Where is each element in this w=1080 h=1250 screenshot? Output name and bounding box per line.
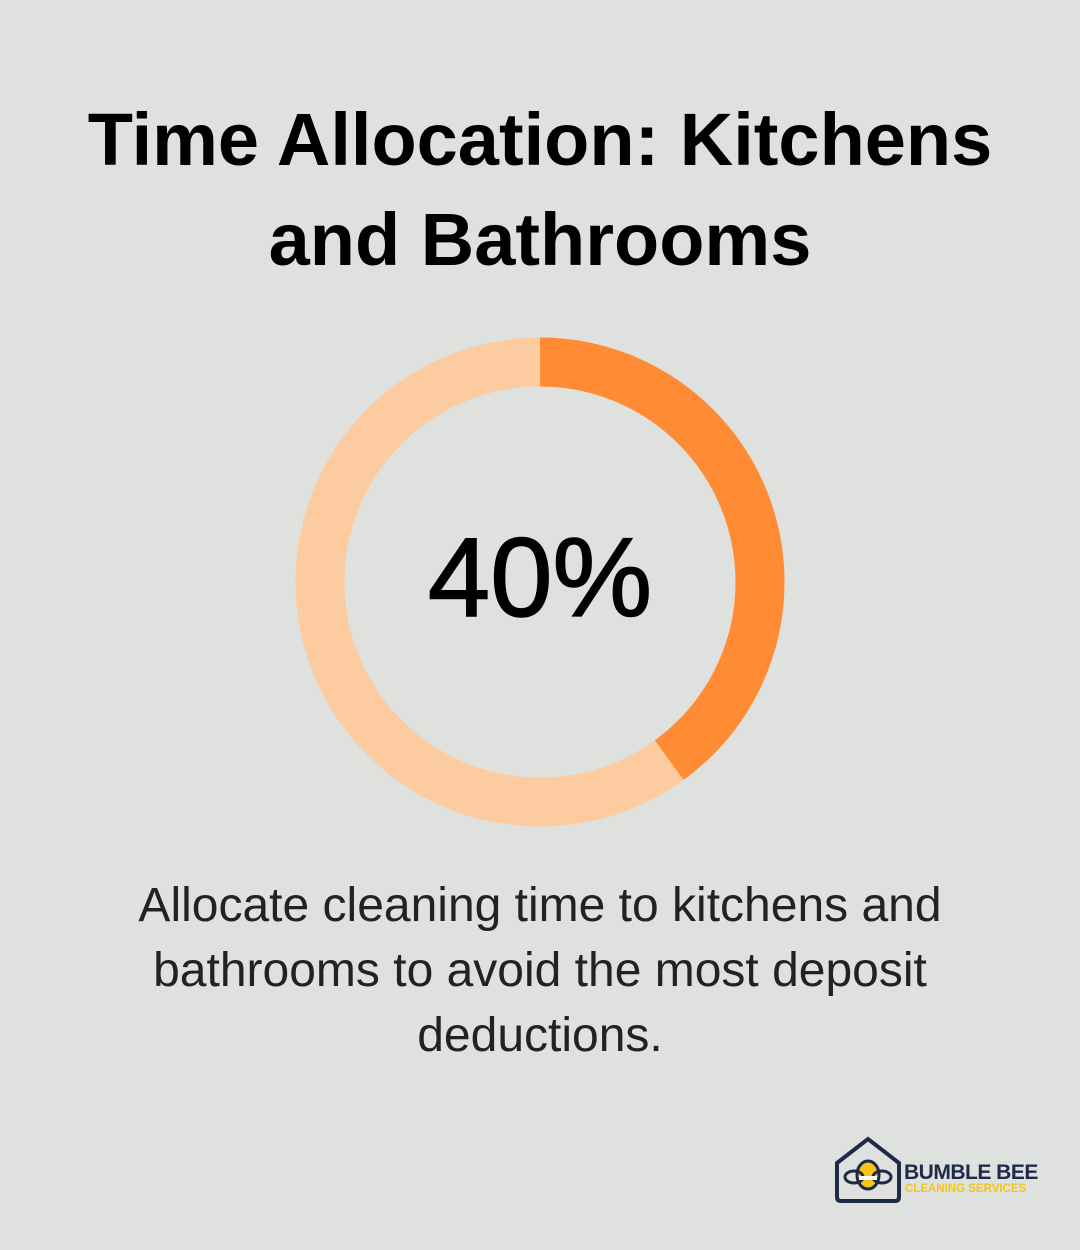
title: and Bathrooms [269, 198, 811, 281]
donut chart: 40% [428, 515, 652, 640]
logo: CLEANING SERVICES [905, 1183, 1026, 1195]
logo: BUMBLE BEE [904, 1161, 1038, 1184]
title [88, 98, 992, 281]
body text: Allocate cleaning time to kitchens and [138, 879, 942, 932]
title: Time Allocation: Kitchens [88, 98, 992, 181]
body text: deductions. [417, 1009, 663, 1062]
logo [835, 1136, 1038, 1203]
body text [138, 879, 942, 1062]
body text: bathrooms to avoid the most deposit [153, 944, 927, 997]
